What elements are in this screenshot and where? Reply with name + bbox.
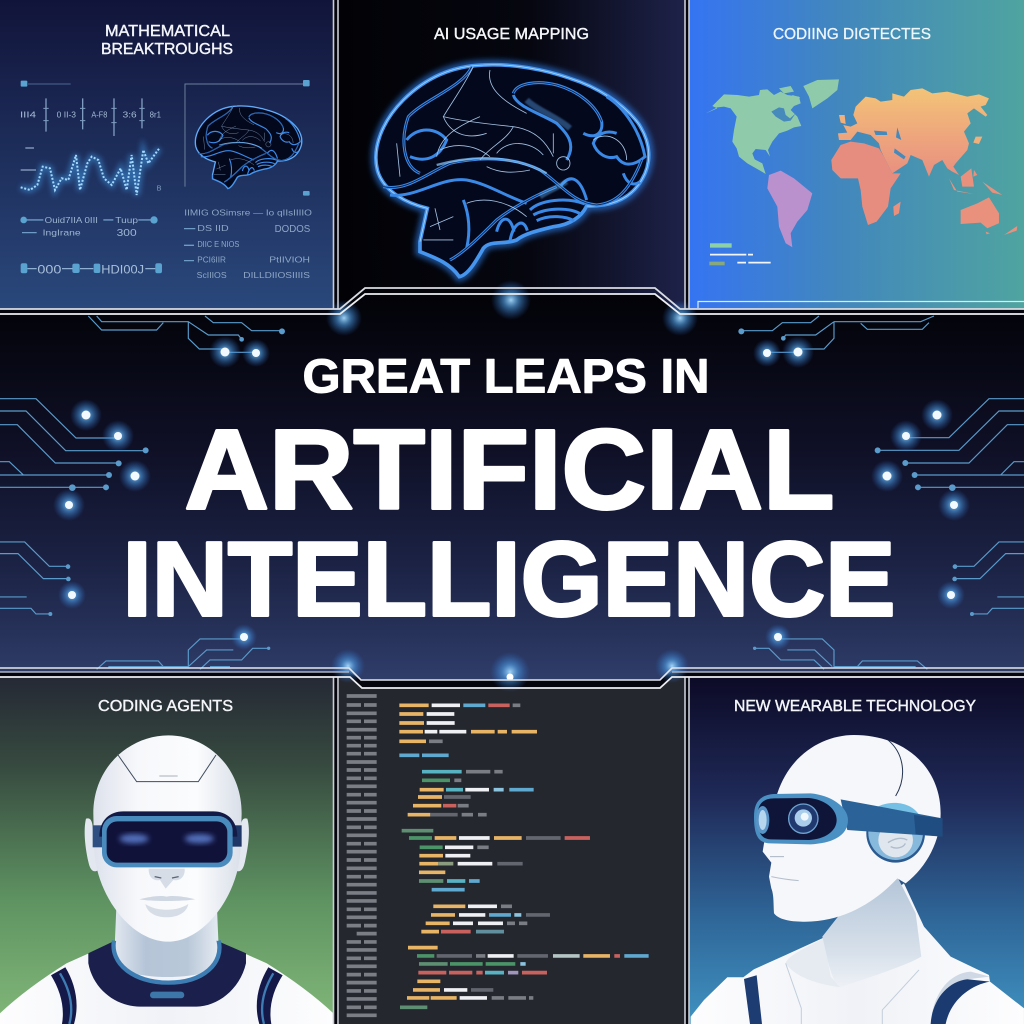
heading: mathematical breakthroughs (101, 23, 233, 58)
brain illustration (376, 65, 649, 277)
right data labels (184, 209, 312, 280)
readout rows with nodes: HDI00J (101, 262, 144, 276)
heading: AI usage mapping: AI USAGE MAPPING (434, 26, 589, 43)
heading: mathematical breakthroughs: MATHEMATICAL (105, 23, 230, 40)
right data labels: PCI6IIR (197, 255, 226, 264)
map legend (709, 243, 771, 265)
south america (767, 171, 812, 247)
title line: intelligence: INTELLIGENCE (122, 520, 896, 638)
chart: glowing waveform with labels (20, 81, 162, 195)
panel: coding digtectes world map (689, 0, 1024, 309)
chart: glowing waveform with labels: A‑F8 (91, 110, 108, 120)
circuit nodes: left (48, 328, 285, 650)
heading: mathematical breakthroughs: BREAKTROUGHS (101, 41, 233, 58)
right data labels: DIIC E NIOS (197, 240, 239, 249)
panel: AI usage mapping (339, 0, 685, 309)
right data labels: DODOS (275, 224, 311, 235)
chart: glowing waveform with labels: B (157, 184, 162, 193)
heading: coding digtectes: CODIING DIGTECTES (773, 26, 931, 43)
heading: coding agents: CODING AGENTS (98, 698, 233, 715)
heading: new wearable technology: NEW WEARABLE TECHNOLOGY (734, 698, 976, 715)
circuit traces: right (741, 316, 1024, 669)
figure in profile with headset (691, 735, 1024, 1024)
readout rows with nodes: Tuup (115, 215, 138, 225)
panel: mathematical breakthroughs (0, 0, 333, 309)
readout rows with nodes: 300 (117, 228, 137, 239)
small brain figure with bracket (185, 80, 310, 196)
glowing nodes (53, 280, 970, 692)
world map (706, 79, 1017, 247)
panel: code editor (339, 677, 685, 1024)
panel: new wearable technology (689, 677, 1024, 1024)
chart: glowing waveform with labels: 3:6 (123, 110, 137, 120)
right data labels: DS IID (197, 224, 229, 233)
chart: glowing waveform with labels: 8r1 (150, 110, 161, 120)
readout rows with nodes: Ouid7IIA 0III (45, 215, 98, 225)
right data labels: ScIIIOS (197, 271, 227, 280)
right data labels: IIMIG OSimsre — Io qIIsIIIIO (184, 209, 312, 218)
panel: coding agents (0, 677, 333, 1024)
code lines (399, 705, 649, 1007)
title line: great leaps in: GREAT LEAPS IN (302, 350, 710, 404)
readout rows with nodes (20, 215, 162, 276)
readout rows with nodes: IngIrane (43, 227, 81, 237)
circuit traces: left (0, 316, 282, 669)
robot figure with visor (0, 735, 333, 1024)
title line: artificial: ARTIFICIAL (184, 406, 834, 532)
eurasia (838, 88, 989, 177)
right data labels: DILLDIIOSIIIIS (243, 271, 310, 280)
line number column (347, 696, 377, 1015)
africa (831, 142, 901, 225)
chart: glowing waveform with labels: 0 II-3 (57, 110, 76, 120)
readout rows with nodes: 000 (37, 262, 62, 276)
right data labels: PtIIVIOH (269, 255, 310, 264)
islands and australia (839, 115, 1017, 235)
chart: glowing waveform with labels: III4 (20, 110, 36, 120)
circuit nodes: right (738, 328, 974, 650)
banner: title area (0, 280, 1024, 692)
main title (122, 350, 896, 638)
north america (706, 79, 839, 174)
